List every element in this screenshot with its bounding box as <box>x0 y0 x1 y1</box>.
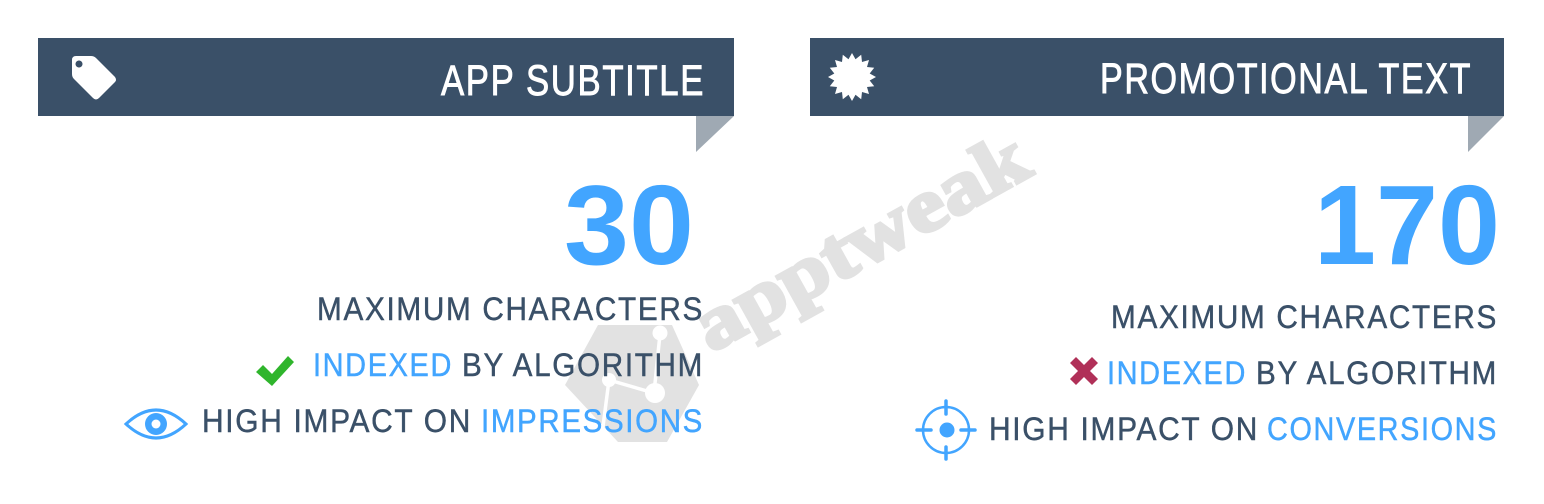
text: indexed by algorithm <box>1107 355 1498 391</box>
text: high impact on conversions <box>989 411 1498 447</box>
big number: 170: 170 <box>1314 162 1500 288</box>
text: indexed by algorithm: BY ALGORITHM <box>1256 355 1498 391</box>
icon: target crosshair <box>917 401 975 459</box>
text: high impact on impressions: HIGH IMPACT ON <box>202 403 472 439</box>
text: indexed by algorithm: BY ALGORITHM <box>462 347 704 383</box>
header banner: app subtitle: APP SUBTITLE <box>441 57 705 105</box>
icon: red cross <box>1070 357 1098 385</box>
text: maximum characters: MAXIMUM CHARACTERS <box>317 291 704 327</box>
header banner: promotional text <box>810 38 1504 152</box>
icon: eye <box>126 410 186 438</box>
panel: promotional text <box>810 38 1504 459</box>
text: high impact on impressions: IMPRESSIONS <box>481 403 704 439</box>
text: high impact on conversions: CONVERSIONS <box>1267 411 1498 447</box>
text: high impact on conversions: HIGH IMPACT ON <box>989 411 1259 447</box>
watermark: apptweak logo <box>565 115 1044 442</box>
watermark: apptweak logo: apptweak <box>679 115 1044 368</box>
text: high impact on impressions <box>202 403 704 439</box>
text: indexed by algorithm: INDEXED <box>313 347 453 383</box>
header banner: app subtitle <box>38 38 734 152</box>
text: indexed by algorithm <box>313 347 704 383</box>
icon: starburst badge <box>828 53 876 101</box>
panel: app subtitle <box>38 38 734 439</box>
text: maximum characters: MAXIMUM CHARACTERS <box>1111 299 1498 335</box>
icon: green check mark <box>256 356 294 386</box>
text: indexed by algorithm: INDEXED <box>1107 355 1247 391</box>
big number: 30: 30 <box>564 162 694 288</box>
icon: price tag <box>72 56 116 100</box>
